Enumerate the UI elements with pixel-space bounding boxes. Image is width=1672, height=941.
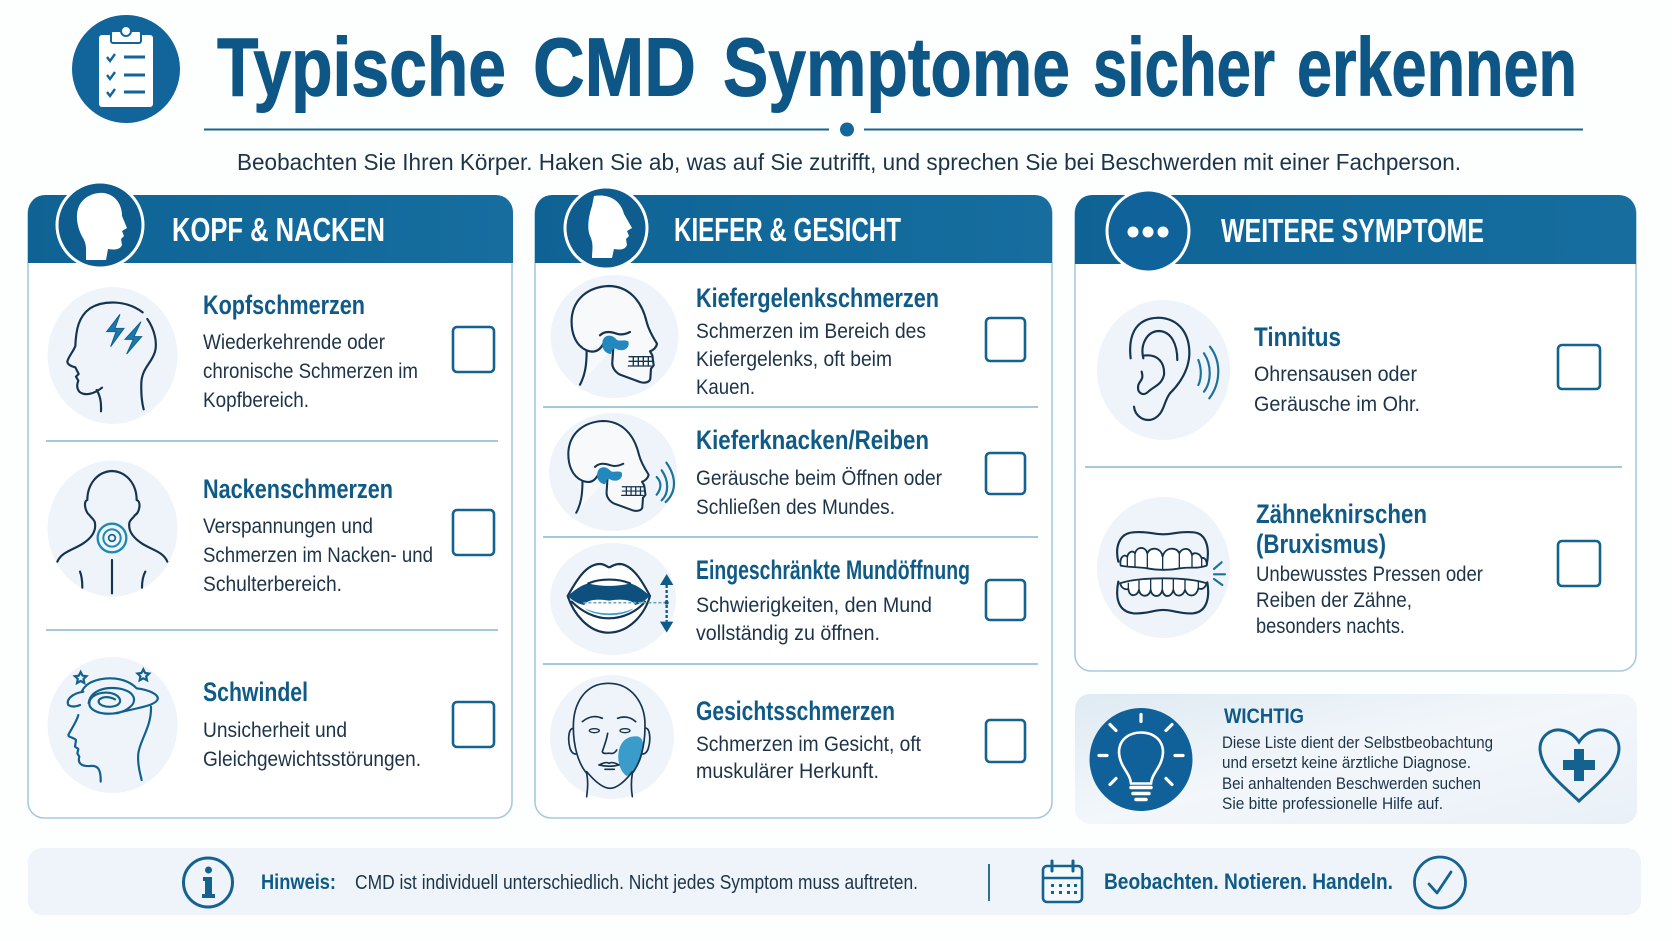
item: Schwindel: Unsicherheit und: [203, 719, 347, 742]
item: Schwindel: [48, 657, 494, 793]
title: CMD: [533, 20, 696, 114]
item: Kieferknacken/Reiben: Schließen des Mundes.: [696, 496, 895, 519]
item: Nackenschmerzen: Schmerzen im Nacken- und: [203, 544, 433, 567]
item: Kieferknacken/Reiben: Geräusche beim Öffnen oder: [696, 467, 942, 490]
item: Zähneknirschen: (Bruxismus): [1256, 529, 1386, 559]
icon: profile silhouette: [565, 187, 647, 269]
item: Gesichtsschmerzen: Schmerzen im Gesicht, oft: [696, 733, 921, 756]
item: Eingeschränkte Mundöffnung: [550, 543, 1025, 655]
item: Kopfschmerzen: Kopfschmerzen: [203, 290, 365, 320]
footer note: CMD ist individuell unterschiedlich. Nicht jedes Symptom muss auftreten.: [355, 872, 918, 894]
item: Kieferknacken/Reiben: Kieferknacken/Reiben: [696, 425, 929, 455]
callout: Wichtig: [1075, 694, 1637, 824]
panel heading: WEITERE SYMPTOME: [1221, 212, 1484, 249]
callout text: Bei anhaltenden Beschwerden suchen: [1222, 775, 1481, 793]
item: Eingeschränkte Mundöffnung: Eingeschränkte Mundöffnung: [696, 555, 970, 585]
title: erkennen: [1297, 20, 1577, 114]
title: Typische: [217, 20, 506, 114]
icon: light bulb: [1090, 708, 1192, 811]
item: Nackenschmerzen: Verspannungen und: [203, 515, 373, 538]
item: Tinnitus: Geräusche im Ohr.: [1254, 393, 1420, 416]
item: Kiefergelenkschmerzen: Kauen.: [696, 376, 755, 399]
item: Kiefergelenkschmerzen: Schmerzen im Bereich des: [696, 320, 926, 343]
item: Schwindel: Schwindel: [203, 677, 308, 707]
icon: head silhouette: [57, 182, 143, 268]
item: Zähneknirschen: Zähneknirschen: [1256, 499, 1427, 529]
title divider: [204, 122, 1583, 136]
item: Eingeschränkte Mundöffnung: vollständig zu öffnen.: [696, 622, 880, 645]
panel heading: KOPF & NACKEN: [172, 211, 385, 248]
title: sicher: [1093, 20, 1275, 114]
callout text: Sie bitte professionelle Hilfe auf.: [1222, 795, 1443, 813]
item: Kieferknacken/Reiben: [549, 413, 1025, 531]
panel: Kiefer & Gesicht: [535, 187, 1052, 818]
item: Tinnitus: Ohrensausen oder: [1254, 363, 1417, 386]
icon: calendar: [1043, 861, 1082, 902]
item: Zähneknirschen: Unbewusstes Pressen oder: [1256, 563, 1483, 586]
panel: Kopf & Nacken: [28, 182, 513, 818]
item: Nackenschmerzen: Schulterbereich.: [203, 573, 342, 596]
icon: three dots: [1107, 190, 1189, 272]
subtitle: Beobachten Sie Ihren Körper. Haken Sie ab, was auf Sie zutrifft, und sprechen Sie bei Beschwerden mit einer Fachperson.: [237, 149, 1461, 175]
item: Zähneknirschen: Reiben der Zähne,: [1256, 589, 1412, 612]
item: Tinnitus: [1097, 300, 1600, 440]
item: Kopfschmerzen: chronische Schmerzen im: [203, 360, 418, 383]
item: Kopfschmerzen: Kopfbereich.: [203, 389, 309, 412]
panel heading: KIEFER & GESICHT: [674, 211, 901, 248]
footer motto: Beobachten. Notieren. Handeln.: [1104, 869, 1393, 894]
callout text: WICHTIG: [1224, 705, 1304, 728]
item: Kiefergelenkschmerzen: [550, 275, 1025, 399]
item: Zähneknirschen: [1097, 497, 1600, 638]
item: Kopfschmerzen: Wiederkehrende oder: [203, 331, 385, 354]
item: Nackenschmerzen: Nackenschmerzen: [203, 474, 393, 504]
item: Eingeschränkte Mundöffnung: Schwierigkeiten, den Mund: [696, 594, 932, 617]
item: Nackenschmerzen: [48, 460, 494, 596]
icon: info: [184, 858, 232, 907]
footer note: Hinweis:: [261, 871, 336, 894]
icon: heart with cross: [1540, 730, 1619, 801]
title: Symptome: [723, 20, 1070, 114]
footer bar: [28, 848, 1641, 915]
item: Gesichtsschmerzen: Gesichtsschmerzen: [696, 696, 895, 726]
item: Schwindel: Gleichgewichtsstörungen.: [203, 748, 421, 771]
item: Kopfschmerzen: [48, 287, 494, 424]
item: Kiefergelenkschmerzen: Kiefergelenkschmerzen: [696, 283, 939, 313]
icon: check circle: [1414, 857, 1466, 908]
item: Tinnitus: Tinnitus: [1254, 322, 1341, 352]
callout text: [1222, 705, 1493, 813]
item: Zähneknirschen: besonders nachts.: [1256, 615, 1405, 638]
header icon: clipboard: [72, 15, 180, 123]
item: Gesichtsschmerzen: [550, 675, 1025, 799]
panel: Weitere Symptome: [1075, 190, 1636, 671]
item: Gesichtsschmerzen: muskulärer Herkunft.: [696, 760, 879, 783]
callout text: und ersetzt keine ärztliche Diagnose.: [1222, 754, 1471, 772]
callout text: Diese Liste dient der Selbstbeobachtung: [1222, 734, 1493, 752]
item: Kiefergelenkschmerzen: Kiefergelenks, oft beim: [696, 348, 892, 371]
